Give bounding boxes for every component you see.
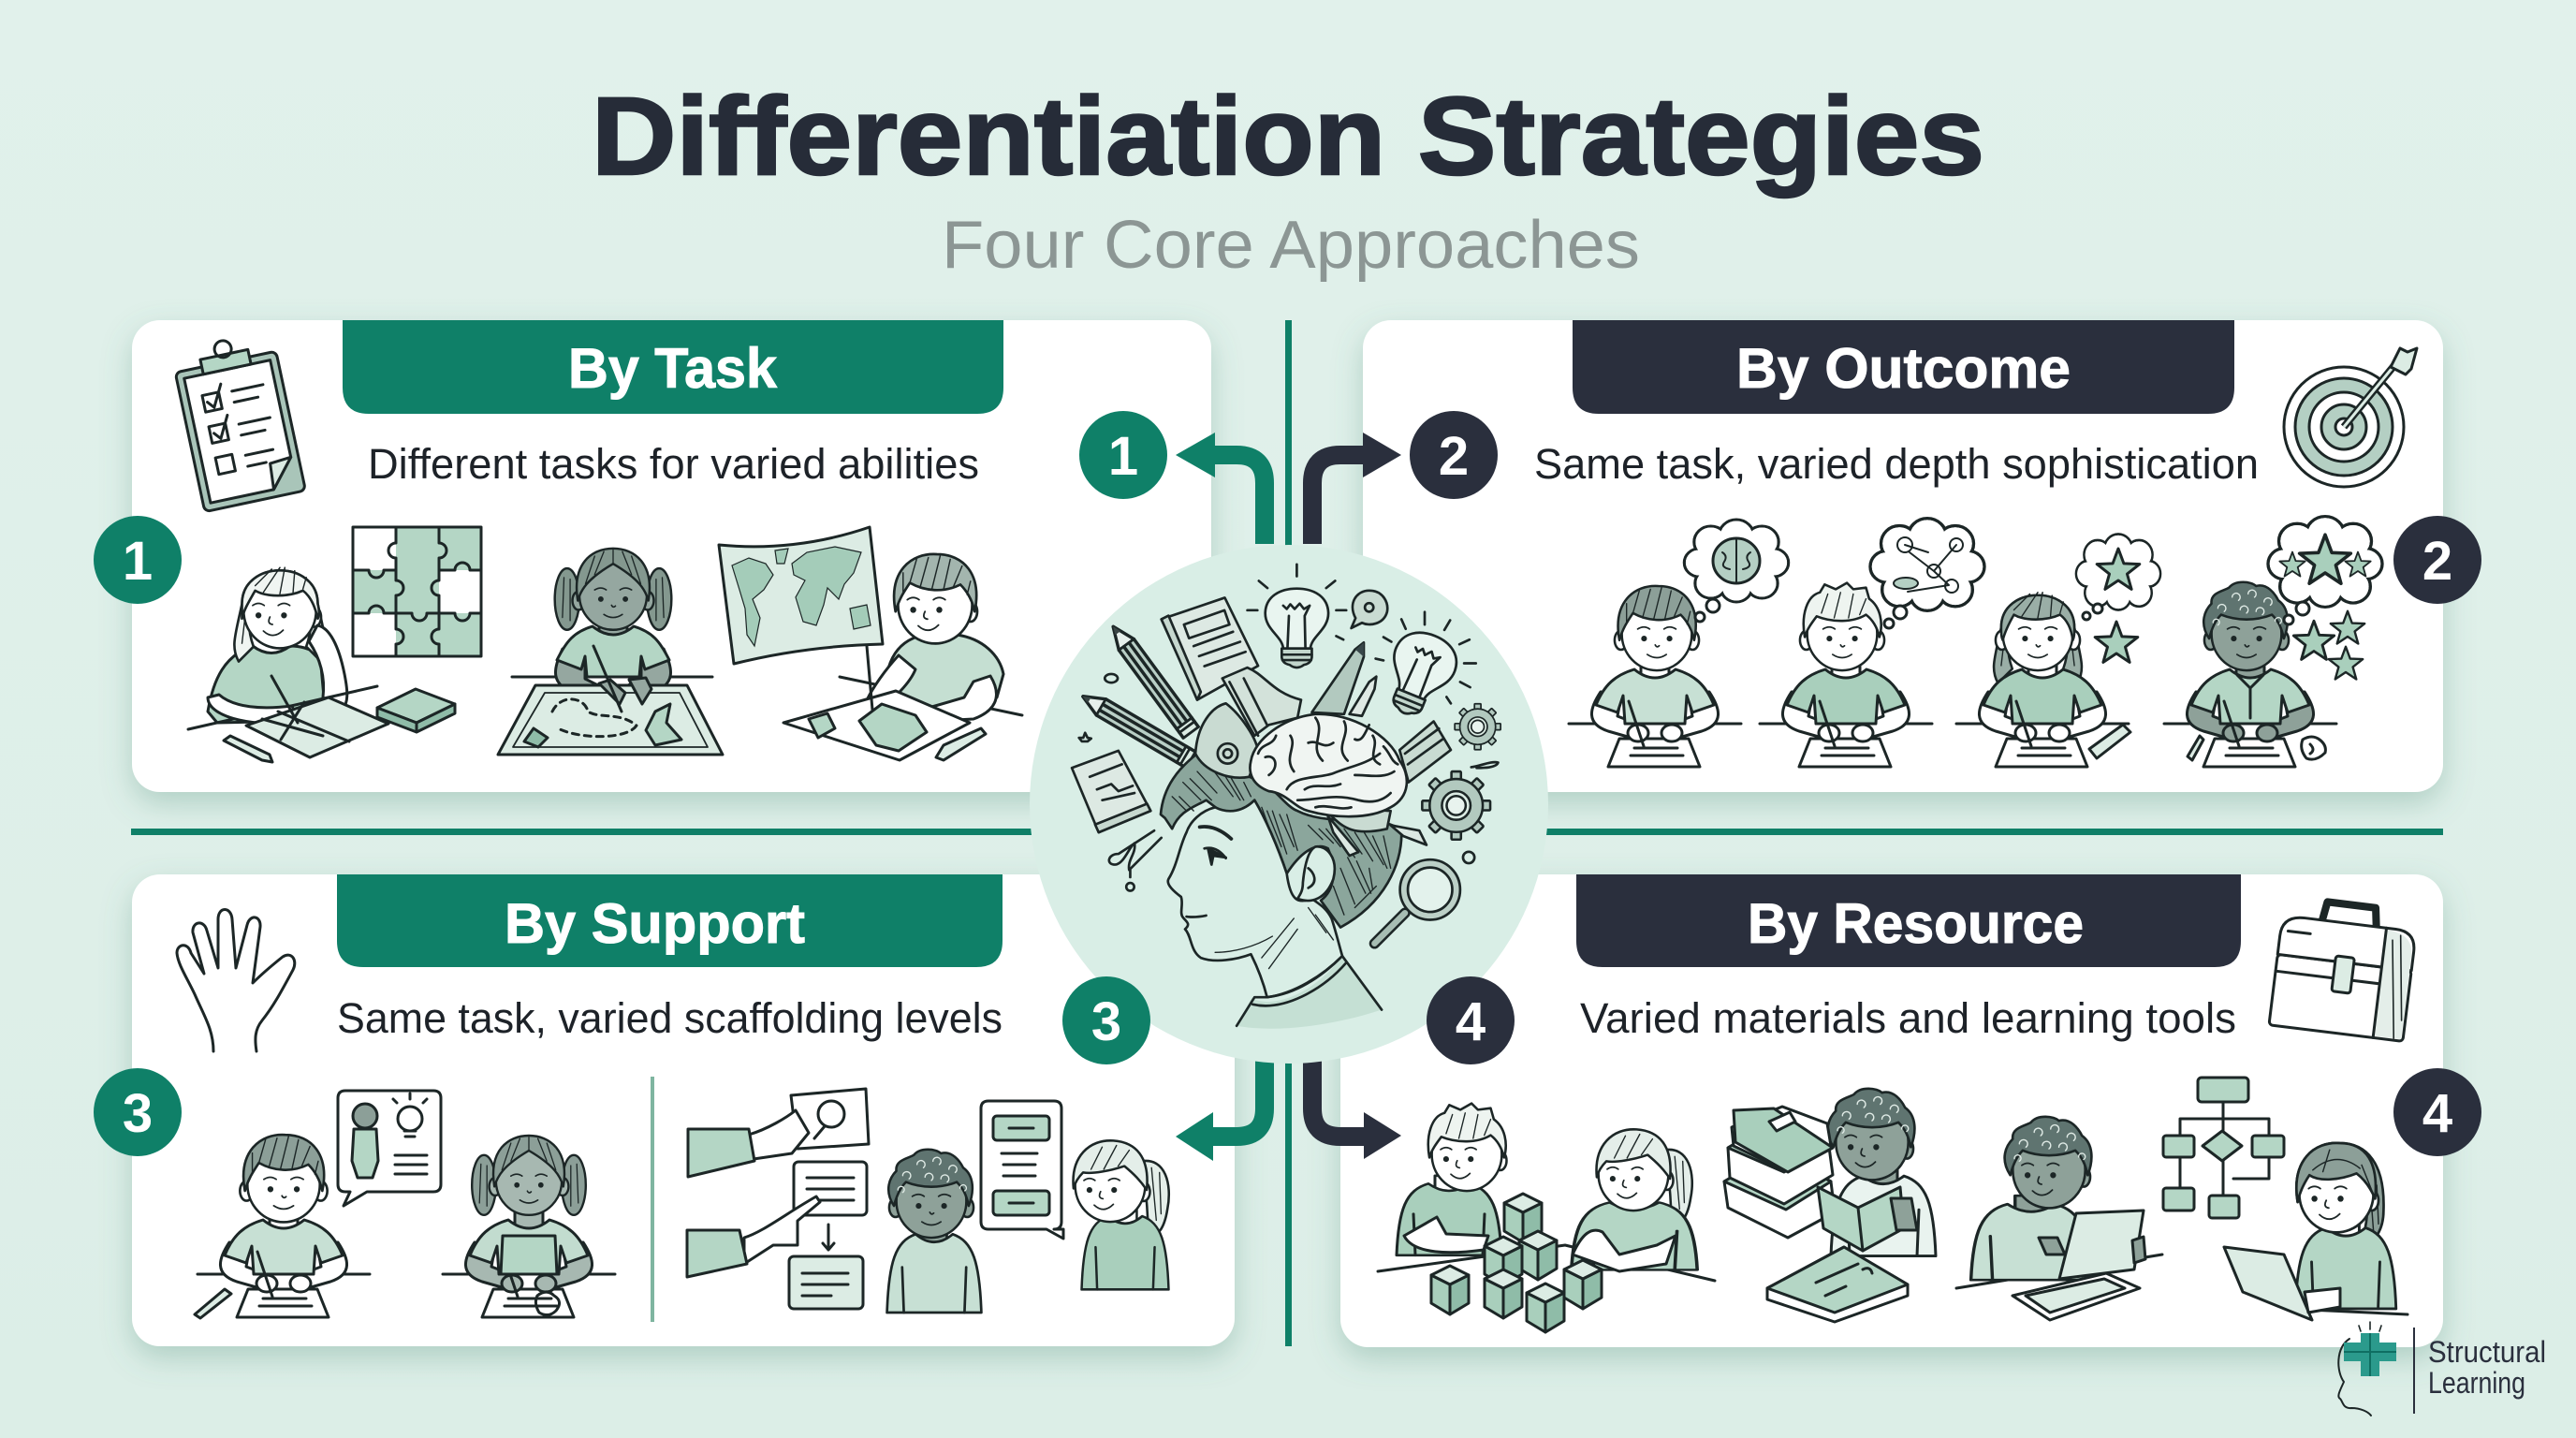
panel card xyxy=(1363,320,2443,792)
arrow: to by resource xyxy=(1312,1061,1401,1159)
child: pigtails girl with overalls xyxy=(443,1136,615,1317)
arrow: to by support xyxy=(1176,1061,1265,1161)
description: Varied materials and learning tools xyxy=(1580,994,2236,1042)
heading bar xyxy=(337,874,1003,967)
description: Different tasks for varied abilities xyxy=(368,440,979,488)
icon: clipboard xyxy=(170,330,305,512)
panel card xyxy=(1340,874,2443,1347)
heading bar: By Support xyxy=(505,892,805,955)
badge: 4 outer: 4 xyxy=(2422,1083,2452,1144)
child: dark-haired boy xyxy=(887,1150,981,1313)
badge: 1 inner xyxy=(1079,411,1167,499)
magnifier xyxy=(1374,859,1460,944)
badge: 3 outer: 3 xyxy=(123,1083,153,1144)
gears xyxy=(1422,704,1500,840)
children with blocks xyxy=(1378,1104,1715,1332)
hair xyxy=(1161,754,1401,928)
icon: hand xyxy=(177,910,295,1051)
child 1 with brain thought xyxy=(1569,520,1789,767)
light bulbs xyxy=(1248,565,1476,725)
subtitle: Four Core Approaches xyxy=(942,208,1640,283)
pencils and books xyxy=(1072,597,1451,832)
title: Differentiation Strategies xyxy=(592,75,1984,198)
world map poster xyxy=(719,527,883,664)
badge: 4 inner xyxy=(1427,976,1515,1064)
child with stack of books xyxy=(1724,1089,1936,1322)
center circle xyxy=(1030,545,1548,1064)
puzzle poster xyxy=(353,527,481,656)
panel: by support xyxy=(94,874,1235,1346)
heading bar: By Outcome xyxy=(1736,337,2071,400)
badge: 2 inner xyxy=(1410,411,1498,499)
panel card xyxy=(132,320,1211,792)
heading bar: By Resource xyxy=(1748,892,2084,955)
badge: 2 outer: 2 xyxy=(2422,531,2452,592)
child: boy with map xyxy=(783,554,1022,760)
face profile xyxy=(1168,800,1382,1029)
badge: 4 inner: 4 xyxy=(1456,991,1486,1052)
child 3 with star thought xyxy=(1956,535,2160,767)
arrow: to by outcome xyxy=(1312,433,1401,544)
badge: 4 outer xyxy=(2393,1068,2481,1156)
heading bar xyxy=(1573,320,2234,414)
doodles xyxy=(1079,674,1498,891)
logo: Structural Learning xyxy=(2338,1322,2546,1416)
flowchart xyxy=(2163,1078,2284,1218)
logo: Structural Learning: Learning xyxy=(2428,1366,2525,1400)
badge: 3 inner xyxy=(1062,976,1150,1064)
icon: target xyxy=(2284,348,2417,487)
child: ponytail girl xyxy=(1074,1140,1169,1289)
badge: 1 outer: 1 xyxy=(123,531,153,592)
child with tablet xyxy=(1956,1117,2162,1320)
child 2 with network thought xyxy=(1760,519,1984,767)
logo text: Structural xyxy=(2428,1335,2546,1369)
child 4 with stars thought xyxy=(2164,517,2382,767)
heading bar xyxy=(1576,874,2241,967)
badge: 3 inner: 3 xyxy=(1091,991,1121,1052)
center circle illustration xyxy=(1030,545,1548,1064)
badge: 2 inner: 2 xyxy=(1439,426,1469,487)
description: Same task, varied depth sophistication xyxy=(1534,440,2259,488)
badge: 1 inner: 1 xyxy=(1108,426,1138,487)
logo icon xyxy=(2338,1322,2396,1416)
badge: 1 outer xyxy=(94,516,182,604)
panel card xyxy=(132,874,1235,1346)
speech panel xyxy=(981,1101,1063,1239)
icon: toolbox xyxy=(2269,897,2419,1041)
divider xyxy=(651,1077,654,1322)
badge: 3 outer xyxy=(94,1068,182,1156)
description: Same task, varied scaffolding levels xyxy=(337,994,1003,1042)
arrow: to by task xyxy=(1176,433,1265,544)
heading bar xyxy=(343,320,1003,414)
hand with card xyxy=(688,1089,869,1177)
child: girl with tablet xyxy=(2224,1143,2408,1320)
child: boy with speech bubble xyxy=(195,1091,441,1318)
hand pointing to card xyxy=(687,1162,867,1309)
panel: by outcome xyxy=(1363,320,2481,792)
child: girl with puzzle xyxy=(188,567,455,762)
heading bar: By Task xyxy=(568,337,778,400)
panel: by resource xyxy=(1340,874,2481,1347)
child: pigtails with treasure map xyxy=(498,549,723,755)
student head with brain and ideas xyxy=(1072,565,1500,1029)
panel: by task xyxy=(94,320,1211,792)
badge: 2 outer xyxy=(2393,516,2481,604)
brain xyxy=(1195,703,1427,856)
